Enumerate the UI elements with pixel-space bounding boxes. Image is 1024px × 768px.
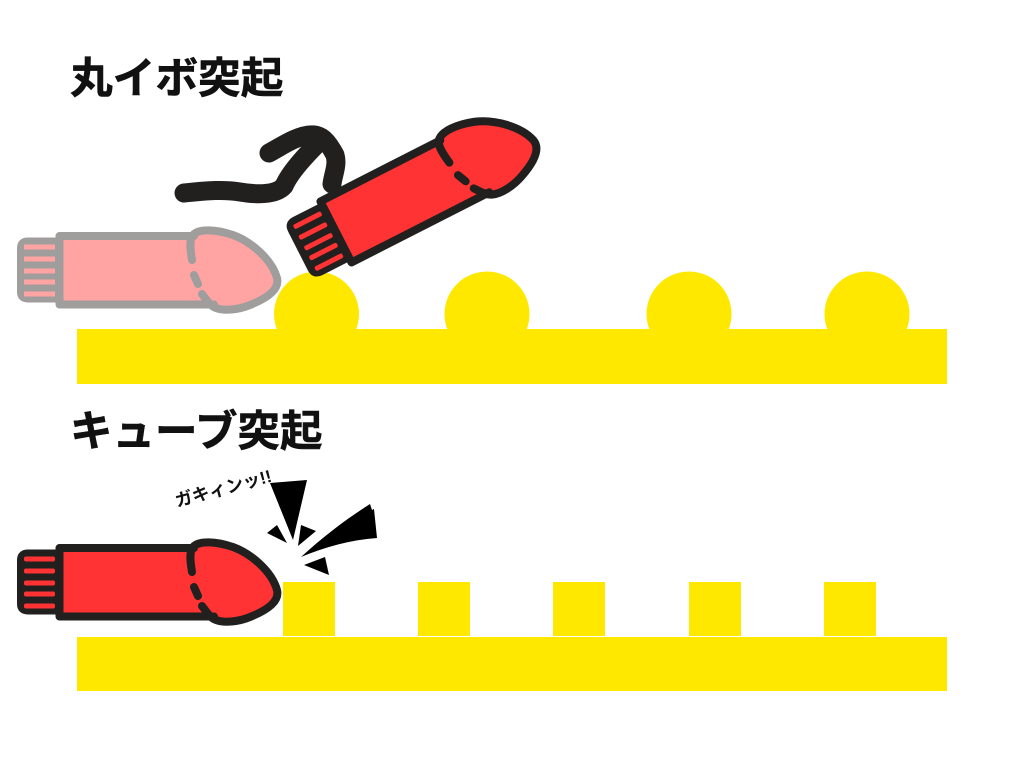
title: cube bump heading: キューブ突起 (70, 409, 322, 456)
bottom yellow base with cube bumps (77, 582, 947, 691)
icon: red pen stopped by the cube (20, 542, 277, 622)
top yellow base with round bumps (77, 272, 947, 384)
icon: faded pen before the jump (20, 230, 277, 310)
icon: red pen jumping over the bump (283, 97, 548, 285)
sound effect text: ガキィンッ!! (173, 466, 274, 511)
arrow: curved jump arrow (184, 135, 336, 194)
title: round bump heading: 丸イボ突起 (70, 55, 283, 103)
impact burst (267, 480, 377, 575)
